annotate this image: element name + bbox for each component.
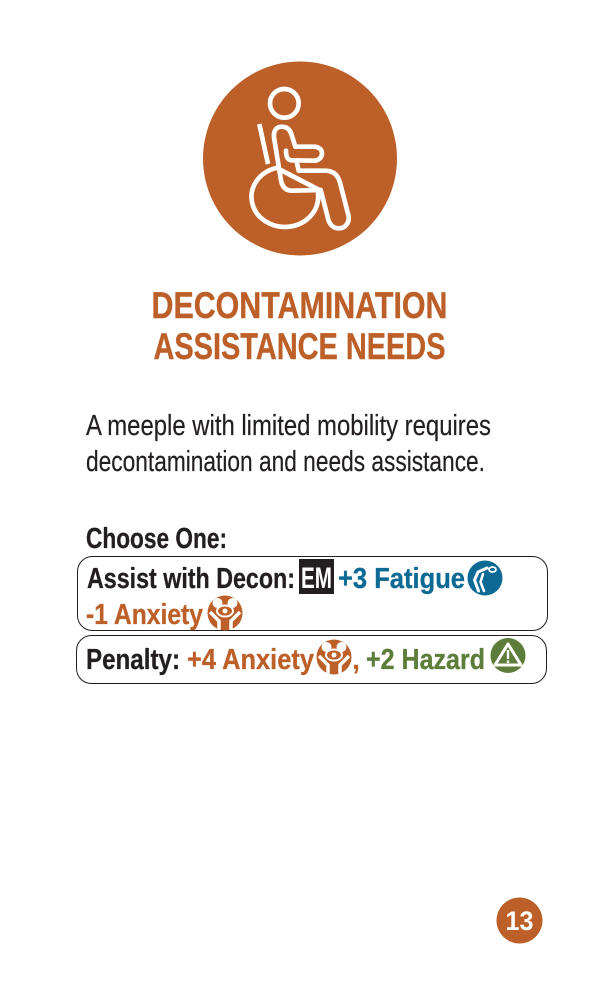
badge: EM	[299, 559, 334, 595]
title: DECONTAMINATION	[152, 285, 448, 326]
title	[152, 285, 448, 367]
description text	[86, 410, 491, 478]
title: ASSISTANCE NEEDS	[154, 326, 446, 367]
comma: ,	[352, 644, 360, 676]
heading: choose one: Choose One:	[86, 523, 227, 555]
icon: wheelchair user in circle	[203, 62, 397, 256]
anxiety reduction: -1 Anxiety	[86, 599, 203, 631]
icon: hazard	[490, 638, 526, 673]
anxiety penalty: +4 Anxiety	[187, 644, 314, 676]
panel: assist with decon	[78, 556, 548, 632]
panel: penalty	[76, 636, 546, 684]
label: penalty: Penalty:	[86, 644, 180, 676]
icon: anxiety	[316, 640, 352, 676]
page number	[496, 898, 542, 944]
description text: decontamination and needs assistance.	[86, 446, 485, 478]
badge: EM: EM	[301, 562, 332, 595]
icon: fatigue	[468, 560, 502, 596]
hazard penalty: +2 Hazard	[366, 644, 485, 676]
description text: A meeple with limited mobility requires	[86, 410, 491, 442]
page number: 13	[506, 906, 534, 936]
label: assist with decon: Assist with Decon:	[87, 563, 295, 595]
icon: anxiety	[208, 596, 242, 632]
fatigue cost: +3 Fatigue	[338, 563, 465, 595]
